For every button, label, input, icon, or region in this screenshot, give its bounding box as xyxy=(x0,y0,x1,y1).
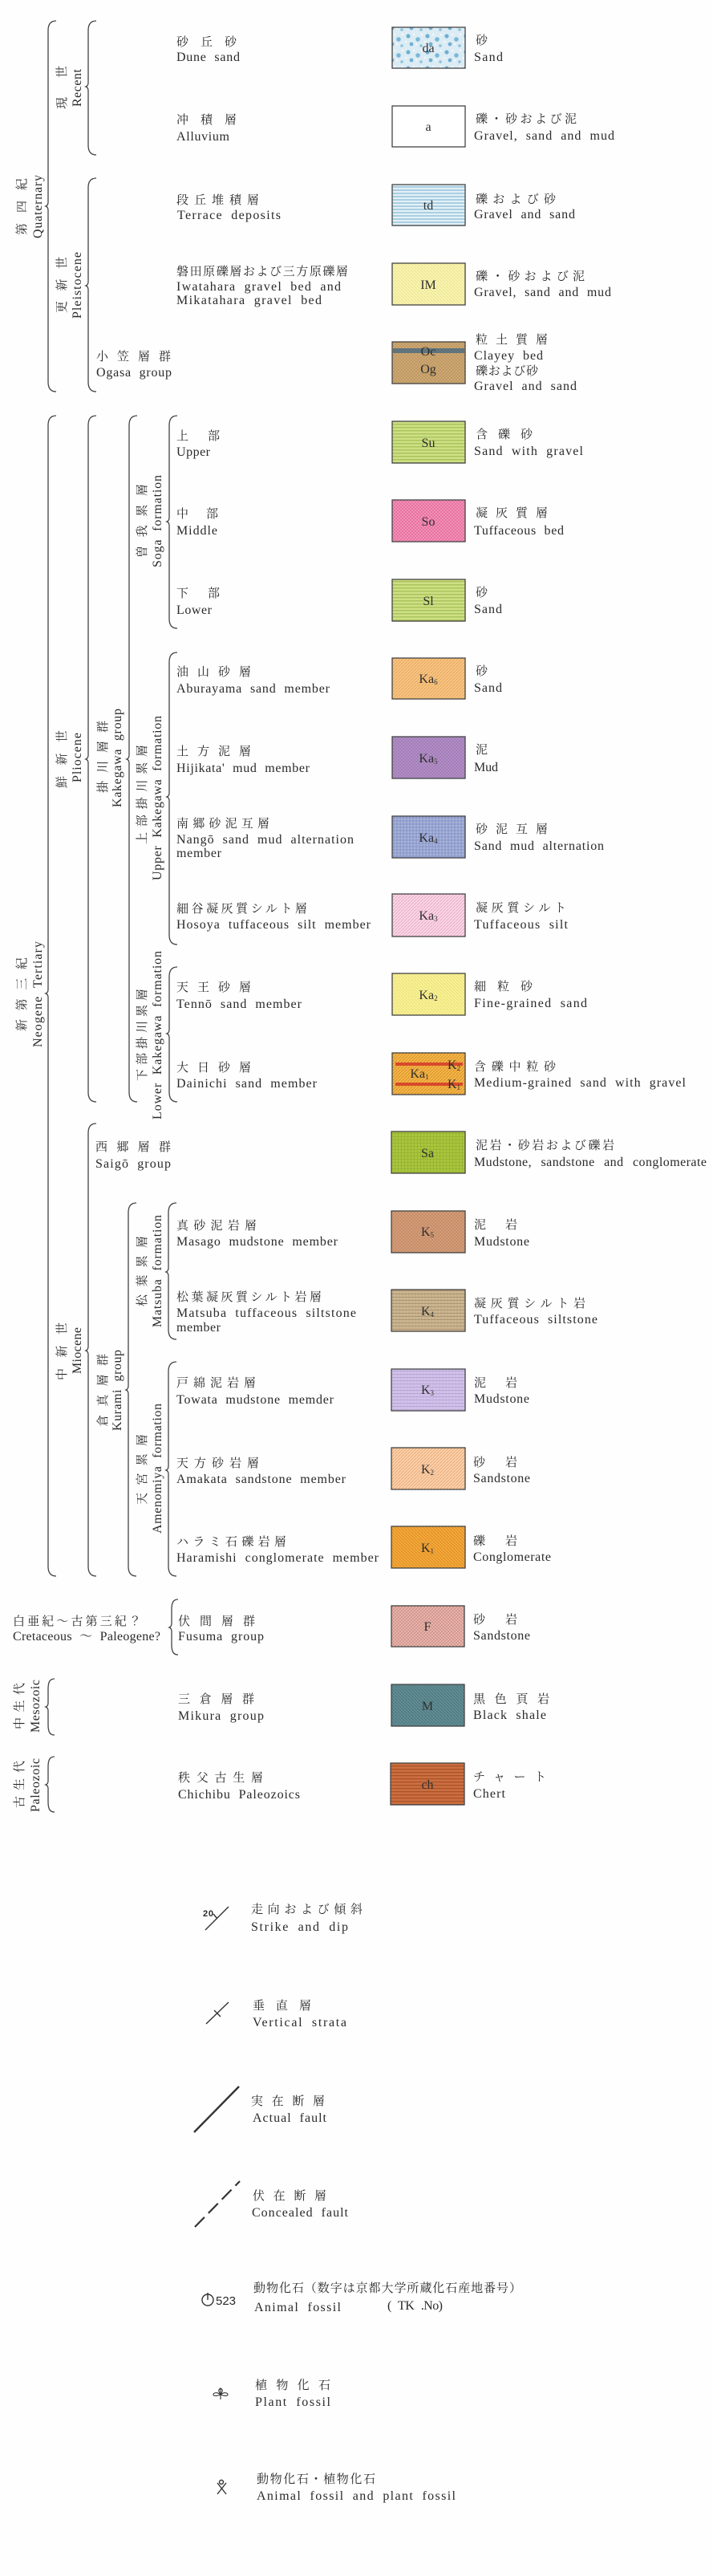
symbol row: animal fossil: Animal fossil xyxy=(254,2301,342,2314)
symbol row: strike and dip: 走向および傾斜 xyxy=(251,1903,363,1916)
row: Haramishi conglomerate: Haramishi conglomerate member xyxy=(176,1551,379,1565)
label: Kakegawa group: 掛川層群 xyxy=(96,721,110,793)
swatch: Sa: Sa xyxy=(421,1147,434,1160)
row: Nango sand mud alternation xyxy=(176,816,604,860)
swatch: Su xyxy=(392,421,465,463)
row: Soga upper: Upper xyxy=(176,445,211,459)
bracket: Upper Kakegawa formation xyxy=(167,652,177,945)
symbol row: concealed fault: Concealed fault xyxy=(252,2206,349,2220)
label: Miocene: Miocene xyxy=(71,1327,84,1374)
row: Nango sand mud alternation: 砂泥互層 xyxy=(476,823,548,836)
row: Saigo group: Saigō group xyxy=(95,1157,171,1171)
symbol row: vertical strata: Vertical strata xyxy=(253,2016,346,2030)
bracket: Kurami group xyxy=(126,1203,136,1576)
row: alluvium xyxy=(176,106,614,147)
swatch: a xyxy=(392,106,465,147)
label: Matsuba formation: 松葉累層 xyxy=(135,1236,149,1306)
row: Fusuma group: Cretaceous ～ Paleogene? xyxy=(13,1630,160,1644)
row: Ogasa group: Ogasa group xyxy=(96,366,172,380)
swatch: Ka3 xyxy=(392,894,465,937)
row: Ogasa group: 礫および砂 xyxy=(476,364,539,378)
row: Towata mudstone: 戸綿泥岩層 xyxy=(176,1376,256,1390)
row: Soga upper: Sand with gravel xyxy=(474,445,584,458)
row: Matsuba tuffaceous siltstone: Matsuba tuffaceous siltstone xyxy=(176,1306,356,1320)
label: Upper Kakegawa formation: 上部掛川累層 xyxy=(136,745,149,844)
swatch: Ka1 with K2 and K1 beds: 1 xyxy=(425,1073,429,1081)
label: Kurami group xyxy=(95,1350,124,1431)
row: Aburayama sand: Sand xyxy=(474,681,502,695)
row: Chichibu Paleozoics: Chichibu Paleozoics xyxy=(178,1788,300,1802)
swatch: Oc and Og: Og xyxy=(420,363,436,376)
swatch: Ka1 with K2 and K1 beds xyxy=(392,1053,465,1095)
symbol row: plant fossil: 植物化石 xyxy=(255,2378,330,2392)
row: alluvium: 冲積層 xyxy=(176,113,237,127)
row: Amakata sandstone: Sandstone xyxy=(473,1472,530,1485)
row: Iwatahara and Mikatahara gravel: Gravel, sand and mud xyxy=(474,286,611,299)
row: Ogasa group xyxy=(96,333,577,393)
row: Fusuma group: 砂岩 xyxy=(473,1613,517,1627)
row: Soga lower: 砂 xyxy=(476,586,488,599)
row: Dainichi sand: 含礫中粒砂 xyxy=(474,1059,557,1074)
swatch: M: M xyxy=(422,1700,433,1713)
swatch: M xyxy=(391,1684,464,1726)
swatch: F xyxy=(391,1606,464,1647)
row: Mikura group: Mikura group xyxy=(178,1709,264,1723)
row: dune sand: Sand xyxy=(474,51,503,64)
swatch: Sl xyxy=(392,579,465,621)
row: Amakata sandstone: 天方砂岩層 xyxy=(176,1456,259,1470)
swatch: Ka5: Ka xyxy=(419,752,434,766)
row: Nango sand mud alternation: Nangō sand mud alternation xyxy=(176,833,354,847)
label: Neogene Tertiary: 新第三紀 xyxy=(14,957,29,1031)
row: Masago mudstone: Masago mudstone member xyxy=(176,1235,338,1249)
row: Chichibu Paleozoics: チャート xyxy=(473,1771,546,1784)
row: Amakata sandstone xyxy=(176,1448,530,1489)
icon: animal fossil 523: 523 xyxy=(216,2294,236,2308)
row: Matsuba tuffaceous siltstone: Tuffaceous siltstone xyxy=(474,1313,598,1327)
row: Ogasa group: 小笠層群 xyxy=(96,350,171,364)
label: Pliocene xyxy=(55,730,84,788)
swatch: Oc and Og xyxy=(392,342,465,384)
label: Pleistocene: 更新世 xyxy=(55,257,69,313)
row: dune sand: Dune sand xyxy=(176,51,240,64)
row: terrace deposits: Gravel and sand xyxy=(474,208,575,221)
row: Fusuma group: Fusuma group xyxy=(178,1630,264,1644)
row: Nango sand mud alternation: Sand mud alternation xyxy=(474,839,604,853)
row: Iwatahara and Mikatahara gravel: Iwatahara gravel bed and xyxy=(176,280,341,294)
row: Ogasa group: Clayey bed xyxy=(474,349,543,363)
label: Pliocene: Pliocene xyxy=(71,733,84,782)
label: Paleozoic: Paleozoic xyxy=(29,1758,43,1812)
label: Recent xyxy=(55,66,84,109)
swatch: Ka1 with K2 and K1 beds: Ka xyxy=(410,1067,425,1081)
row: Iwatahara and Mikatahara gravel xyxy=(176,263,611,307)
swatch: IM: IM xyxy=(420,278,436,292)
swatch: Ka6: 6 xyxy=(434,678,438,686)
swatch: Ka1 with K2 and K1 beds: 1 xyxy=(457,1083,460,1091)
row: Aburayama sand: 砂 xyxy=(476,664,488,678)
row: Chichibu Paleozoics: Chert xyxy=(473,1787,506,1801)
symbol row: vertical strata xyxy=(206,1998,346,2030)
label: Lower Kakegawa formation: Lower Kakegawa formation xyxy=(151,951,164,1119)
row: Mikura group: Black shale xyxy=(473,1709,546,1722)
row: Soga upper xyxy=(176,421,584,463)
row: dune sand xyxy=(176,27,503,68)
symbol row: plant fossil: Plant fossil xyxy=(255,2395,331,2409)
symbol row: concealed fault xyxy=(195,2181,349,2227)
swatch: Ka4: 4 xyxy=(434,837,438,845)
row: Iwatahara and Mikatahara gravel: 礫・砂および泥 xyxy=(476,270,585,283)
label: Kakegawa group: Kakegawa group xyxy=(111,709,124,807)
label: Lower Kakegawa formation: 下部掛川累層 xyxy=(136,989,149,1081)
row: Iwatahara and Mikatahara gravel: 磐田原礫層および三方原礫層 xyxy=(176,264,348,278)
panel: age brackets xyxy=(46,21,178,1812)
row: Hosoya tuffaceous silt: 凝灰質シルト xyxy=(476,901,566,915)
row: Haramishi conglomerate: 礫岩 xyxy=(473,1534,517,1548)
row: Fusuma group: 白亜紀～古第三紀？ xyxy=(13,1615,141,1628)
swatch: Ka5: 5 xyxy=(434,758,438,766)
row: Hijikata mud: Hijikata' mud member xyxy=(176,762,310,775)
icon: concealed fault xyxy=(195,2181,240,2227)
row: Soga middle: 凝灰質層 xyxy=(476,506,548,520)
swatch: Ka2: 2 xyxy=(434,994,438,1002)
row: Matsuba tuffaceous siltstone: member xyxy=(176,1321,221,1335)
row: Chichibu Paleozoics xyxy=(178,1763,546,1805)
row: Soga middle xyxy=(176,500,564,542)
bracket: Pleistocene xyxy=(86,178,96,392)
bracket: Kakegawa group xyxy=(127,416,137,1102)
swatch: IM xyxy=(392,263,465,305)
swatch: K2: 2 xyxy=(431,1469,434,1477)
row: Ogasa group: Gravel and sand xyxy=(474,380,577,393)
row: Soga lower xyxy=(176,579,502,621)
row: terrace deposits xyxy=(176,185,575,226)
row: Hijikata mud xyxy=(176,737,498,778)
row: dune sand: 砂丘砂 xyxy=(176,35,237,49)
swatch: Ka1 with K2 and K1 beds: K xyxy=(448,1078,457,1091)
swatch: So: So xyxy=(422,515,435,529)
bracket: Fusuma xyxy=(169,1599,178,1655)
symbol row: actual fault: Actual fault xyxy=(253,2111,327,2125)
row: Masago mudstone: 真砂泥岩層 xyxy=(176,1218,257,1233)
label: Matsuba formation: Matsuba formation xyxy=(151,1215,164,1327)
row: Soga lower: Sand xyxy=(474,603,502,616)
row: Hosoya tuffaceous silt: 細谷凝灰質シルト層 xyxy=(176,902,307,916)
row: Saigo group: 西郷層群 xyxy=(95,1140,171,1154)
label: Pleistocene xyxy=(55,252,84,319)
panel: map symbols xyxy=(194,1903,521,2503)
row: Saigo group: 泥岩・砂岩および礫岩 xyxy=(476,1139,614,1152)
row: Fusuma group: Sandstone xyxy=(473,1629,530,1643)
row: Towata mudstone: 泥岩 xyxy=(474,1376,517,1390)
label: Kakegawa group xyxy=(96,709,124,807)
label: Mesozoic: 中生代 xyxy=(13,1683,26,1729)
icon: strike and dip xyxy=(203,1907,229,1930)
row: Matsuba tuffaceous siltstone: 松葉凝灰質シルト岩層 xyxy=(176,1290,322,1304)
bracket: Neogene Tertiary xyxy=(46,416,56,1576)
label: Quaternary xyxy=(15,175,45,238)
bracket: Recent xyxy=(86,21,96,155)
label: Recent: Recent xyxy=(71,68,84,107)
symbol row: animal and plant fossil xyxy=(217,2472,456,2503)
bracket: Paleozoic xyxy=(46,1757,55,1812)
row: Soga middle: Tuffaceous bed xyxy=(474,524,564,538)
row: Masago mudstone xyxy=(176,1211,529,1253)
label: Pleistocene: Pleistocene xyxy=(71,252,84,319)
row: Haramishi conglomerate xyxy=(176,1526,551,1568)
label: Paleozoic xyxy=(13,1758,43,1812)
swatch: Ka1 with K2 and K1 beds: K xyxy=(448,1058,457,1072)
swatch: Sl: Sl xyxy=(423,595,434,608)
row: Fusuma group: 伏間層群 xyxy=(178,1615,255,1628)
row: Masago mudstone: 泥岩 xyxy=(474,1218,517,1232)
row: Mikura group xyxy=(178,1684,549,1726)
swatch: Su: Su xyxy=(422,437,435,450)
label: Soga formation: 曽我累層 xyxy=(136,484,149,558)
icon: plant fossil xyxy=(213,2388,228,2399)
swatch: So xyxy=(392,500,465,542)
symbol row: animal and plant fossil: 動物化石・植物化石 xyxy=(257,2472,375,2486)
bracket: Lower Kakegawa formation xyxy=(167,967,177,1102)
swatch: K5 xyxy=(391,1211,465,1253)
row: Towata mudstone: Towata mudstone memder xyxy=(176,1393,334,1407)
swatch: K1: 1 xyxy=(431,1547,434,1555)
row: Aburayama sand xyxy=(176,658,502,699)
icon: actual fault xyxy=(194,2086,239,2132)
swatch: K3: 3 xyxy=(431,1389,435,1397)
swatch: K1: K xyxy=(421,1542,431,1555)
row: alluvium: Gravel, sand and mud xyxy=(474,129,614,143)
row: Hijikata mud: 土方泥層 xyxy=(176,744,251,758)
icon: strike and dip: 20 xyxy=(203,1909,213,1919)
swatch: ch xyxy=(391,1763,464,1805)
row: Amakata sandstone: Amakata sandstone member xyxy=(176,1473,346,1486)
row: Tenno sand xyxy=(176,973,587,1015)
row: Tenno sand: Fine-grained sand xyxy=(474,997,587,1010)
swatch: K2: K xyxy=(421,1463,431,1477)
swatch: Ka5 xyxy=(392,737,465,778)
row: Soga middle: Middle xyxy=(176,524,217,538)
row: Hosoya tuffaceous silt: Hosoya tuffaceous silt member xyxy=(176,918,371,932)
row: Dainichi sand: 大日砂層 xyxy=(176,1061,251,1075)
swatch: da xyxy=(392,27,465,68)
swatch: Ka4 xyxy=(392,816,465,858)
swatch: a: a xyxy=(425,120,431,134)
swatch: F: F xyxy=(424,1620,431,1634)
row: Soga middle: 中部 xyxy=(176,507,218,521)
label: Matsuba formation xyxy=(135,1215,164,1327)
swatch: ch: ch xyxy=(421,1778,434,1792)
label: Miocene: 中新世 xyxy=(55,1323,69,1380)
row: Hosoya tuffaceous silt: Tuffaceous silt xyxy=(474,918,569,932)
row: Hosoya tuffaceous silt xyxy=(176,894,569,937)
row: Matsuba tuffaceous siltstone xyxy=(176,1290,598,1335)
row: Iwatahara and Mikatahara gravel: Mikatahara gravel bed xyxy=(176,294,322,307)
row: Towata mudstone: Mudstone xyxy=(474,1392,529,1406)
bracket: Amenomiya formation xyxy=(166,1362,176,1576)
swatch: Ka3: Ka xyxy=(419,909,434,923)
swatch: K1 xyxy=(391,1526,465,1568)
row: Soga lower: Lower xyxy=(176,603,213,617)
swatch: Ka2: Ka xyxy=(419,989,434,1002)
row: Aburayama sand: Aburayama sand member xyxy=(176,682,330,696)
row: Tenno sand: 細粒砂 xyxy=(474,980,533,993)
row: Mikura group: 三倉層群 xyxy=(178,1692,254,1706)
label: Recent: 現世 xyxy=(55,66,69,109)
label: Soga formation xyxy=(136,475,164,567)
swatch: Ka3: 3 xyxy=(434,915,438,923)
symbol row: animal fossil xyxy=(202,2281,521,2314)
row: Tenno sand: 天王砂層 xyxy=(176,981,251,994)
symbol row: strike and dip xyxy=(203,1903,363,1934)
label: Quaternary: 第四紀 xyxy=(15,178,29,235)
row: Hijikata mud: 泥 xyxy=(476,743,488,757)
bracket: Mesozoic xyxy=(46,1679,55,1735)
row: Nango sand mud alternation: member xyxy=(176,847,222,860)
row: Ogasa group: 粒土質層 xyxy=(476,333,548,347)
swatch: K5: 5 xyxy=(431,1231,435,1239)
swatch: K4 xyxy=(391,1290,465,1331)
row: Matsuba tuffaceous siltstone: 凝灰質シルト岩 xyxy=(474,1297,585,1310)
symbol row: animal fossil: ( TK .No) xyxy=(387,2299,443,2313)
swatch: K3: K xyxy=(421,1383,431,1397)
symbol row: actual fault xyxy=(194,2086,327,2132)
symbol row: actual fault: 実在断層 xyxy=(251,2094,325,2108)
row: terrace deposits: 段丘堆積層 xyxy=(176,193,259,207)
row: Amakata sandstone: 砂岩 xyxy=(473,1456,517,1469)
label: Upper Kakegawa formation xyxy=(136,716,164,880)
row: Saigo group: Mudstone, sandstone and conglomerate xyxy=(474,1156,707,1169)
row: Masago mudstone: Mudstone xyxy=(474,1235,529,1249)
label: Amenomiya formation xyxy=(135,1404,164,1534)
row: Tenno sand: Tennō sand member xyxy=(176,997,302,1011)
swatch: Ka6: Ka xyxy=(419,672,434,686)
swatch: td xyxy=(392,185,465,226)
row: Chichibu Paleozoics: 秩父古生層 xyxy=(178,1770,263,1785)
row: Dainichi sand: Dainichi sand member xyxy=(176,1077,318,1091)
row: terrace deposits: Terrace deposits xyxy=(177,209,281,222)
swatch: td: td xyxy=(423,199,433,213)
swatch: K3 xyxy=(391,1369,465,1411)
row: dune sand: 砂 xyxy=(476,34,488,47)
swatch: Oc and Og: Oc xyxy=(421,345,435,359)
row: Haramishi conglomerate: Conglomerate xyxy=(473,1550,551,1564)
bracket: Pliocene xyxy=(86,416,96,1102)
swatch: da: da xyxy=(422,42,435,55)
symbol row: animal fossil: 動物化石（数字は京都大学所蔵化石産地番号） xyxy=(253,2281,521,2295)
row: alluvium: Alluvium xyxy=(176,130,230,144)
label: Mesozoic xyxy=(13,1680,43,1733)
row: Towata mudstone xyxy=(176,1369,529,1411)
label: Mesozoic: Mesozoic xyxy=(29,1680,43,1733)
swatch: Ka6 xyxy=(392,658,465,699)
label: Quaternary: Quaternary xyxy=(31,175,45,238)
symbol row: vertical strata: 垂直層 xyxy=(253,1998,311,2013)
label: Paleozoic: 古生代 xyxy=(13,1761,26,1808)
label: Upper Kakegawa formation: Upper Kakegawa formation xyxy=(151,716,164,880)
row: alluvium: 礫・砂および泥 xyxy=(476,112,577,126)
row: Haramishi conglomerate: ハラミ石礫岩層 xyxy=(176,1535,286,1549)
label: Soga formation: Soga formation xyxy=(151,475,164,567)
icon: animal and plant fossil xyxy=(217,2480,226,2494)
label: Amenomiya formation: 天宮累層 xyxy=(135,1434,149,1505)
label: Lower Kakegawa formation xyxy=(136,951,164,1119)
panel: strata rows xyxy=(13,27,707,1805)
row: Soga upper: 上部 xyxy=(176,429,220,443)
label: Miocene xyxy=(55,1323,84,1380)
bracket: Miocene xyxy=(86,1123,96,1576)
icon: animal fossil 523 xyxy=(202,2293,236,2308)
panel: vertical age labels xyxy=(13,66,164,1812)
label: Pliocene: 鮮新世 xyxy=(55,730,69,788)
row: Hijikata mud: Mud xyxy=(474,761,498,774)
swatch: K5: K xyxy=(421,1225,431,1239)
swatch: K2 xyxy=(391,1448,465,1489)
label: Kurami group: 倉真層群 xyxy=(95,1354,110,1427)
label: Neogene Tertiary xyxy=(14,941,45,1047)
row: Fusuma group xyxy=(13,1606,530,1647)
symbol row: plant fossil xyxy=(213,2378,331,2409)
row: Saigo group xyxy=(95,1132,707,1173)
symbol row: concealed fault: 伏在断層 xyxy=(253,2189,326,2203)
row: Soga lower: 下部 xyxy=(176,587,220,600)
label: Kurami group: Kurami group xyxy=(111,1350,124,1431)
swatch: Ka1 with K2 and K1 beds: 2 xyxy=(457,1064,460,1072)
swatch: Sa xyxy=(391,1132,465,1173)
icon: vertical strata xyxy=(206,2002,229,2024)
swatch: K4: K xyxy=(421,1305,431,1318)
bracket: Matsuba formation xyxy=(166,1203,176,1339)
bracket: Soga formation xyxy=(167,416,177,628)
swatch: K4: 4 xyxy=(431,1310,435,1318)
row: Mikura group: 黒色頁岩 xyxy=(473,1692,549,1706)
label: Amenomiya formation: Amenomiya formation xyxy=(151,1404,164,1534)
row: Aburayama sand: 油山砂層 xyxy=(176,665,251,679)
row: Soga upper: 含礫砂 xyxy=(476,427,533,441)
row: Dainichi sand xyxy=(176,1053,687,1095)
symbol row: animal and plant fossil: Animal fossil and plant fossil xyxy=(257,2489,456,2503)
bracket: Quaternary xyxy=(46,21,56,392)
row: terrace deposits: 礫および砂 xyxy=(476,193,557,206)
swatch: Ka2 xyxy=(392,973,465,1015)
row: Dainichi sand: Medium-grained sand with gravel xyxy=(474,1076,687,1090)
symbol row: strike and dip: Strike and dip xyxy=(251,1920,348,1934)
swatch: Ka4: Ka xyxy=(419,831,434,845)
label: Neogene Tertiary: Neogene Tertiary xyxy=(31,941,45,1047)
row: Nango sand mud alternation: 南郷砂泥互層 xyxy=(176,817,269,831)
